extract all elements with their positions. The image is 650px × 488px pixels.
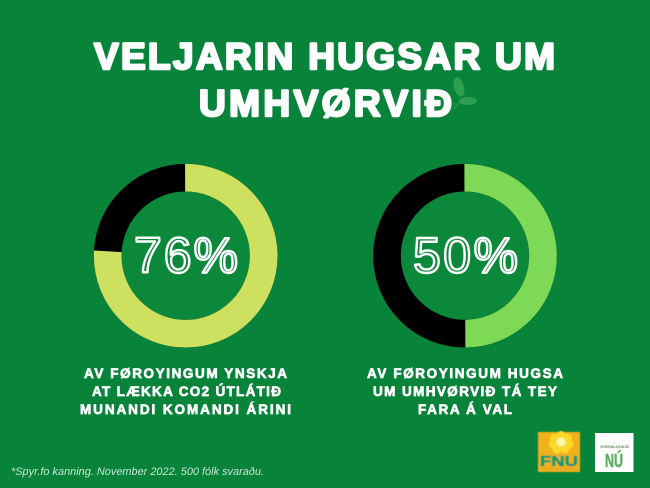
caption: 50% statistic: UM UMHVØRVIÐ TÁ TEY (373, 384, 557, 399)
logo: FNU: FNU (540, 453, 578, 470)
caption: 76% statistic: AV FØROYINGUM YNSKJA (84, 366, 287, 381)
title: UMHVØRVIÐ (199, 83, 452, 124)
icon: green leaves (452, 76, 477, 110)
logo: FNU (538, 431, 580, 472)
caption: 50% statistic: AV FØROYINGUM HUGSA (367, 366, 563, 381)
title (94, 36, 555, 124)
donut chart: 76% (108, 178, 264, 334)
title: VELJARIN HUGSAR UM (94, 36, 555, 77)
caption: 50% statistic: FARA Á VAL (418, 402, 512, 417)
donut chart: 50% (387, 178, 543, 334)
value: 76%: 76% (134, 228, 238, 284)
caption: 76% statistic (80, 366, 291, 417)
caption: 76% statistic: AT LÆKKA CO2 ÚTLÁTIÐ (92, 384, 281, 399)
logo: Verkmannafylkingin NÚ: NÚ (605, 450, 623, 471)
caption: 76% statistic: MUNANDI KOMANDI ÁRINI (80, 402, 291, 417)
footnote: *Spyr.fo kanning. November 2022. 500 fólk svaraðu. (11, 466, 264, 478)
value: 50%: 50% (413, 228, 518, 284)
caption: 50% statistic (367, 366, 563, 417)
logo: Verkmannafylkingin NÚ: VERKMLAGSLÍÐ (600, 444, 629, 449)
logo: Verkmannafylkingin NÚ (595, 433, 634, 472)
